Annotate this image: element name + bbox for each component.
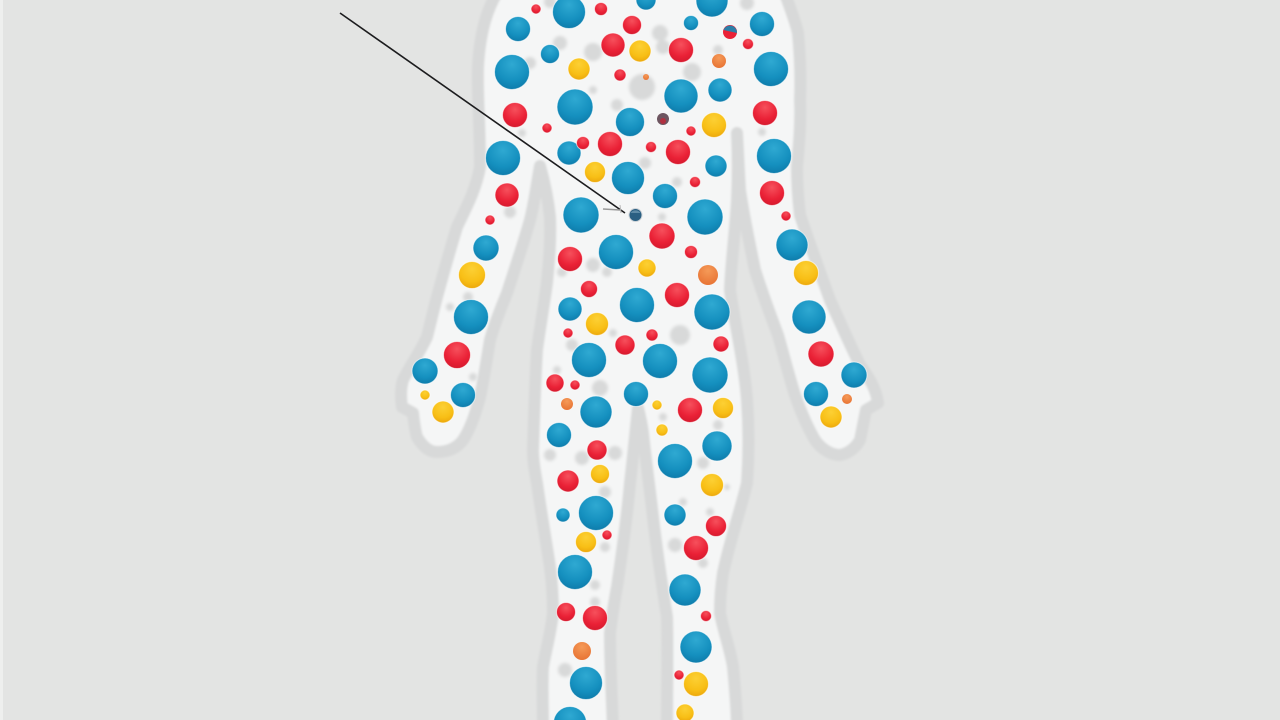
target particle bbox=[628, 208, 642, 222]
red particles bbox=[444, 2, 834, 680]
blue particles bbox=[412, 0, 867, 720]
faint grey blotches bbox=[446, 0, 766, 677]
orange particles bbox=[561, 54, 852, 660]
pointer arrow bbox=[340, 13, 625, 213]
body silhouette bbox=[401, 0, 878, 720]
two-tone particle bbox=[723, 25, 737, 39]
dark mixed particle bbox=[657, 113, 669, 125]
yellow particles bbox=[420, 40, 842, 720]
